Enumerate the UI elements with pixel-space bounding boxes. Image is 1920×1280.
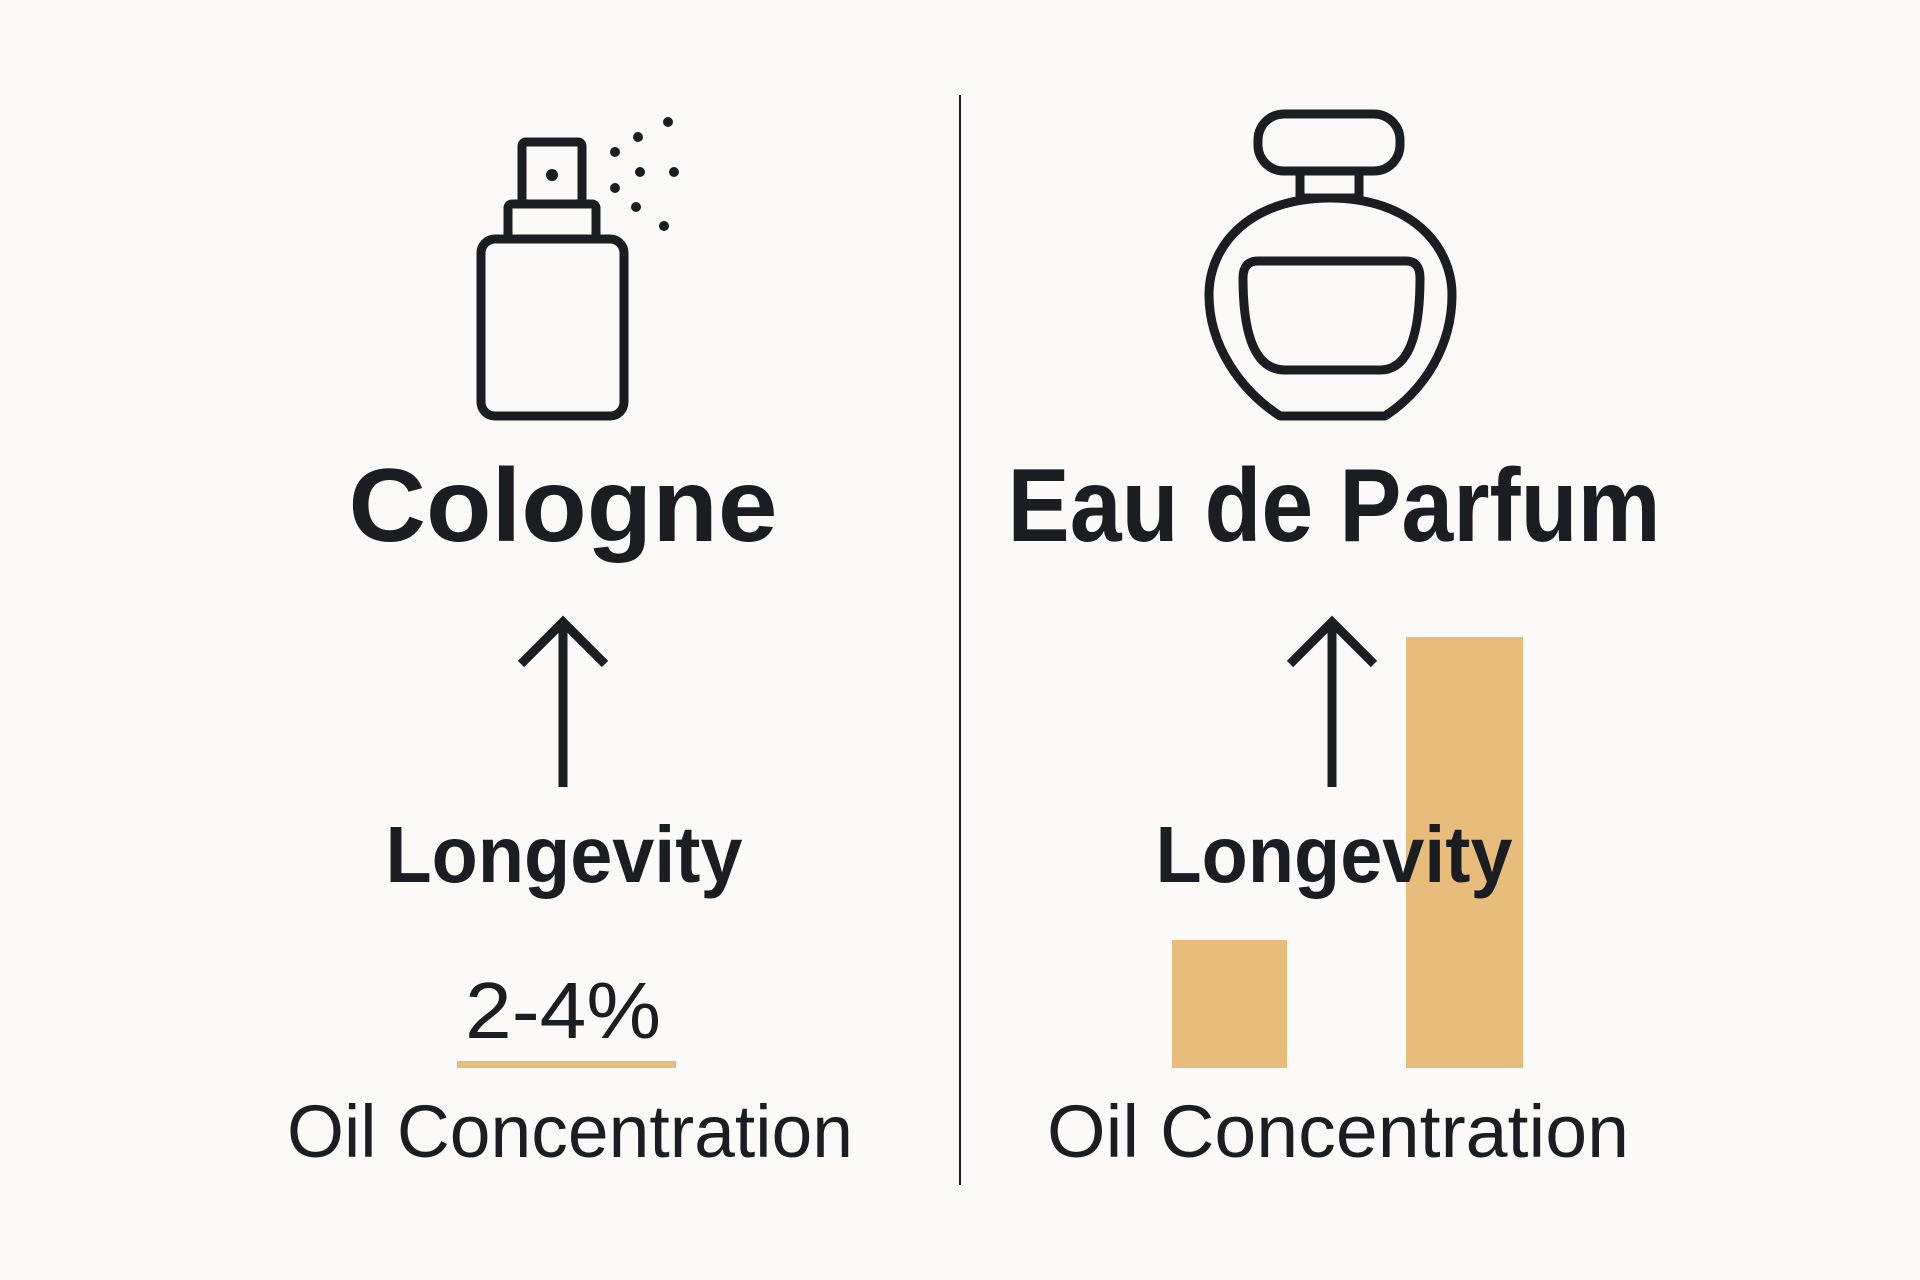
panel: eau de parfum	[1008, 114, 1660, 1173]
arrow: up	[1290, 622, 1374, 787]
label: Oil Concentration: Oil Concentration	[1047, 1090, 1629, 1173]
label: Oil Concentration: Oil Concentration	[287, 1090, 853, 1173]
icon: spray bottle	[481, 117, 679, 416]
label: Longevity: Longevity	[386, 810, 743, 899]
arrow: up	[521, 622, 605, 787]
value: 2-4%: 2-4%	[465, 966, 661, 1055]
bar chart	[1172, 637, 1523, 1068]
underline	[457, 1061, 676, 1068]
heading: Eau de Parfum: Eau de Parfum	[1008, 448, 1660, 564]
panel: cologne	[287, 117, 853, 1173]
heading: Cologne: Cologne	[348, 448, 778, 564]
label: Longevity: Longevity	[1156, 810, 1513, 899]
icon: perfume bottle	[1209, 114, 1452, 416]
